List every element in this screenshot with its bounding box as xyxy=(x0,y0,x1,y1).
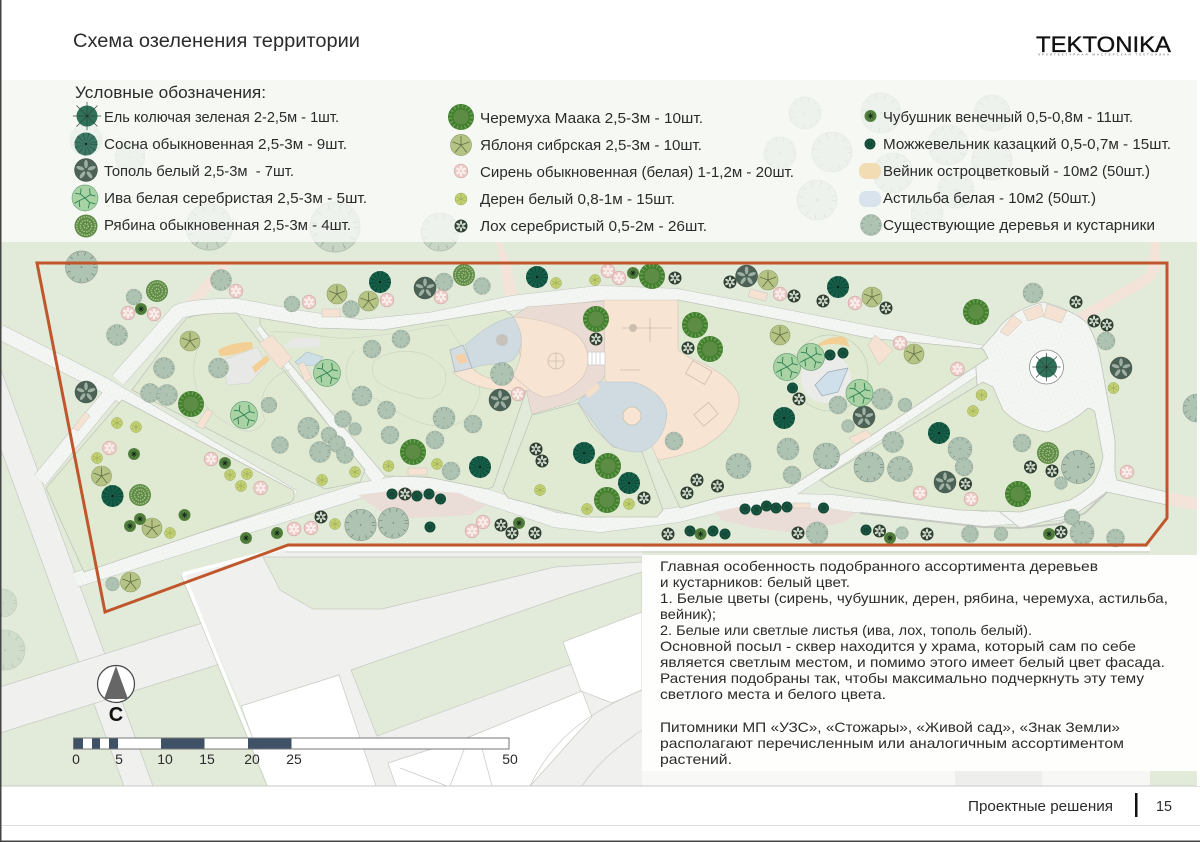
legend column 1: Ива белая серебристая 2,5-3м - 5шт. xyxy=(104,191,367,207)
legend column 1: Ель колючая зеленая 2-2,5м - 1шт. xyxy=(104,110,339,126)
orange site boundary xyxy=(37,263,1167,612)
legend column 1 xyxy=(72,102,367,238)
explanatory text panel xyxy=(642,555,1197,771)
logo: АРХИТЕКТУРНАЯ МАСТЕРСКАЯ ТЕКТОНИКА xyxy=(1038,52,1169,56)
lawns xyxy=(46,300,1103,572)
legend column 2: Дерен белый 0,8-1м - 15шт. xyxy=(480,192,675,208)
silverberry shrubs xyxy=(314,272,1114,540)
explanatory text panel: Питомники МП «УЗС», «Стожары», «Живой сад», «Знак Земли» xyxy=(660,719,1120,735)
explanatory text panel: светлого места и белого цвета. xyxy=(660,686,886,702)
legend column 2: Лох серебристый 0,5-2м - 26шт. xyxy=(480,219,707,235)
bird cherry trees xyxy=(178,263,1031,513)
title: Схема озеленения территории xyxy=(73,31,360,52)
north arrow xyxy=(98,666,134,726)
scale bar: 25 xyxy=(286,751,302,767)
legend heading: Условные обозначения: xyxy=(75,83,266,102)
explanatory text panel: Растения подобраны так, чтобы максимально подчеркнуть эту тему xyxy=(660,670,1144,686)
scale bar xyxy=(72,738,518,767)
legend band translucent overlay xyxy=(0,80,1197,242)
willow trees xyxy=(230,344,873,428)
legend column 2 xyxy=(448,104,794,235)
legend column 2: Яблоня сибрская 2,5-3м - 10шт. xyxy=(480,138,702,154)
playground details xyxy=(450,318,718,426)
tan paved seating platforms xyxy=(73,289,1067,508)
explanatory text panel: Основной посыл - сквер находится у храма, который сам по себе xyxy=(660,638,1136,654)
lilac shrubs xyxy=(102,264,1134,538)
legend column 1: Сосна обыкновенная 2,5-3м - 9шт. xyxy=(104,137,347,153)
legend column 1: Рябина обыкновенная 2,5-3м - 4шт. xyxy=(104,218,351,234)
explanatory text panel: Главная особенность подобранного ассортимента деревьев xyxy=(660,558,1098,574)
playground tan areas xyxy=(452,300,739,460)
legend column 3: Вейник остроцветковый - 10м2 (50шт.) xyxy=(883,164,1150,180)
legend column 3: Астильба белая - 10м2 (50шт.) xyxy=(883,191,1096,207)
legend column 2: Черемуха Маака 2,5-3м - 10шт. xyxy=(480,111,703,127)
footer: 15 xyxy=(1156,799,1172,815)
spruce in plaza bed xyxy=(1030,350,1064,384)
existing trees xyxy=(66,251,1124,591)
curb along south-east edge xyxy=(860,492,1107,528)
logo: TEKTONIKA xyxy=(1036,32,1171,57)
rowan trees xyxy=(129,264,1059,506)
explanatory text panel: вейник); xyxy=(660,606,716,622)
legend column 3: Можжевельник казацкий 0,5-0,7м - 15шт. xyxy=(883,137,1171,153)
blue astilbe beds xyxy=(465,317,667,452)
site plan surroundings xyxy=(0,367,1200,786)
poplar trees xyxy=(75,265,1132,493)
north arrow: С xyxy=(109,704,123,726)
dogwood shrubs xyxy=(92,274,1119,538)
legend column 2: Сирень обыкновенная (белая) 1-1,2м - 20шт. xyxy=(480,165,794,181)
apple trees xyxy=(92,270,924,592)
legend column 3: Чубушник венечный 0,5-0,8м - 11шт. xyxy=(883,110,1133,126)
legend column 1: Тополь белый 2,5-3м - 7шт. xyxy=(104,164,294,180)
footer xyxy=(0,786,1200,842)
legend column 3: Существующие деревья и кустарники xyxy=(883,218,1155,234)
legend column 3 xyxy=(859,110,1171,236)
plaza with exit strip xyxy=(975,302,1167,528)
pine trees xyxy=(102,266,950,507)
mock orange shrubs xyxy=(124,267,1055,544)
scale bar: 10 xyxy=(157,751,173,767)
gardens: rocks, ponds and flower beds xyxy=(218,335,868,411)
pink paving around playground xyxy=(513,301,605,414)
scale bar: 15 xyxy=(199,751,215,767)
juniper shrubs xyxy=(386,348,872,540)
pink gravel beds along south path xyxy=(358,489,856,532)
explanatory text panel: является светлым местом, и помимо этого имеет белый цвет фасада. xyxy=(660,654,1165,670)
explanatory text panel: и кустарников: белый цвет. xyxy=(660,574,850,590)
explanatory text panel: растений. xyxy=(660,751,732,767)
scale bar: 0 xyxy=(72,751,80,767)
explanatory text panel: 2. Белые или светлые листья (ива, лох, тополь белый). xyxy=(660,622,1032,638)
explanatory text panel: располагают перечисленным или аналогичным ассортиментом xyxy=(660,735,1124,751)
explanatory text panel: 1. Белые цветы (сирень, чубушник, дерен, рябина, черемуха, астильба, xyxy=(660,590,1168,606)
hill contour lines xyxy=(194,325,480,431)
walking paths network xyxy=(0,293,1100,580)
scale bar: 50 xyxy=(502,751,518,767)
footer: Проектные решения xyxy=(968,799,1113,815)
scale bar: 20 xyxy=(244,751,260,767)
scale bar: 5 xyxy=(115,751,123,767)
pale pink exit paths xyxy=(180,242,1197,510)
